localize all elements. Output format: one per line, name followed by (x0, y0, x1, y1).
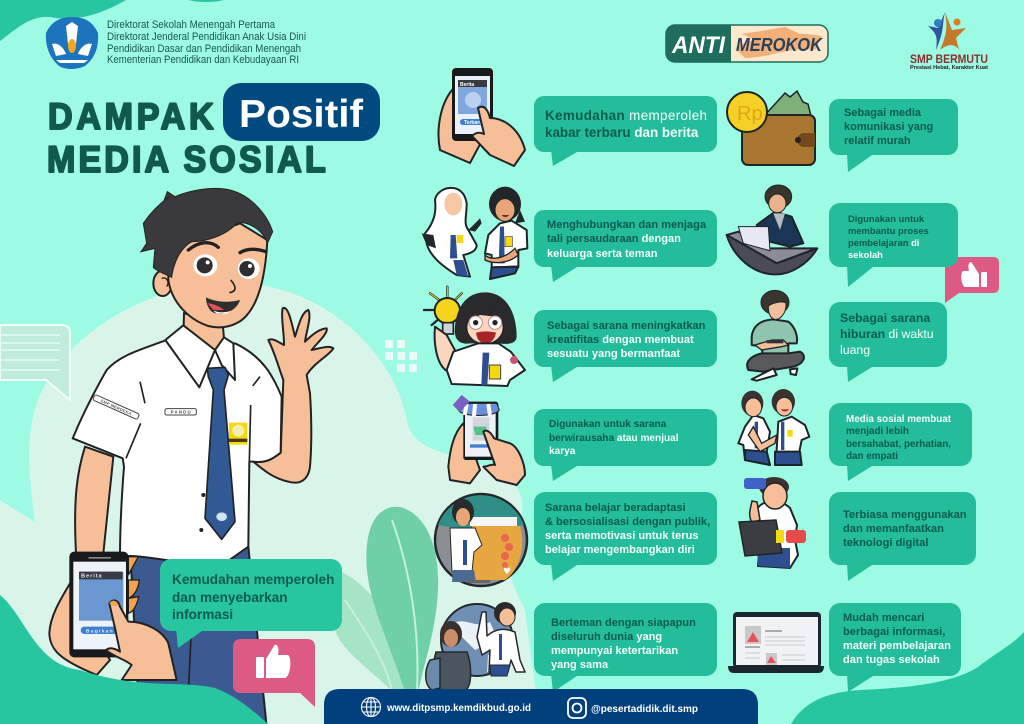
footer bar (324, 689, 758, 724)
right item 5 bubble (829, 492, 976, 581)
item 2 bubble: keluarga serta teman (547, 248, 658, 260)
item 4 illustration: online shop phone (448, 395, 525, 485)
main phone in hand: Berita (81, 573, 103, 579)
name tags (165, 409, 196, 415)
item 2 bubble (534, 210, 717, 282)
right item 6 bubble: dan tugas sekolah (843, 654, 940, 666)
title: dampak media sosial: DAMPAK (48, 96, 214, 137)
eyebrows (188, 243, 266, 253)
left hand (49, 583, 110, 675)
item 1 bubble (534, 96, 717, 166)
right item 2 illustration: person at desk with laptop (727, 185, 817, 274)
item 5 bubble: Sarana belajar beradaptasi (545, 502, 686, 514)
right item 5 illustration: boy with laptop (739, 477, 806, 568)
right item 5 bubble: teknologi digital (843, 537, 928, 549)
fingertips (128, 557, 139, 613)
item 3 bubble: sesuatu yang bermanfaat (547, 348, 681, 360)
left speech bubble (160, 559, 342, 648)
right item 1 bubble: komunikasi yang (844, 121, 933, 133)
right item 3 bubble: hiburan di waktu (840, 327, 934, 341)
item 6 illustration: friends and globe (426, 602, 525, 690)
bottom left green blob (0, 595, 268, 724)
item 3 illustration: girl with light bulb (424, 287, 525, 386)
item 6 bubble: mempunyai ketertarikan (551, 645, 678, 657)
item 3 bubble: kreatifitas dengan membuat (547, 334, 694, 346)
item 5 bubble (534, 492, 717, 581)
right item 2 bubble: sekolah (848, 249, 883, 260)
item 1 illustration: hand with phone (438, 68, 525, 166)
main phone in hand: Bagikan (86, 628, 113, 634)
name tags: PANDU (171, 410, 191, 415)
hair (141, 188, 273, 277)
item 3 bubble (534, 310, 717, 382)
item 1 illustration: hand with phone: Berita (460, 82, 474, 88)
right arm and waving hand (253, 308, 333, 483)
right item 5 bubble: Terbiasa menggunakan (843, 509, 967, 521)
item 4 bubble: Digunakan untuk sarana (549, 419, 667, 430)
left speech bubble: dan menyebarkan (172, 590, 288, 605)
phone body (69, 552, 128, 657)
logo: smp bermutu: Prestasi Hebat, Karakter Kuat (910, 65, 988, 71)
right hand (106, 600, 177, 680)
icon: instagram (568, 698, 586, 718)
right item 4 bubble: menjadi lebih (846, 426, 909, 437)
left pink thumbs up (233, 639, 315, 707)
right item 2 bubble: pembelajaran di (848, 237, 919, 248)
header institution text: Direktorat Jenderal Pendidikan Anak Usia Dini (107, 31, 306, 43)
right item 2 bubble: Digunakan untuk (848, 213, 925, 224)
header institution text: Kementerian Pendidikan dan Kebudayaan RI (107, 54, 299, 66)
collar (165, 325, 235, 387)
right item 4 bubble: bersahabat, perhatian, (846, 439, 951, 450)
buttons (201, 493, 205, 497)
main phone in hand (49, 552, 177, 680)
website: www.ditpsmp.kemdikbud.go.id (386, 702, 531, 714)
instagram handle: @pesertadidik.dit.smp (591, 703, 698, 715)
right pink thumbs up (945, 257, 999, 303)
necktie (205, 367, 235, 539)
decorative speech bubble (0, 325, 70, 400)
item 4 bubble (534, 409, 717, 481)
right item 6 bubble: berbagai informasi, (843, 626, 945, 638)
right item 1 bubble (829, 99, 958, 172)
bottom right green blob (791, 632, 1024, 724)
right item 4 illustration: two friends (738, 389, 809, 465)
header logo (46, 17, 98, 69)
logo: smp bermutu: SMP BERMUTU (910, 54, 988, 66)
mouth (206, 297, 240, 314)
item 6 bubble: yang sama (551, 659, 609, 671)
right item 3 bubble: luang (840, 343, 870, 357)
right item 5 bubble: dan memanfaatkan (843, 523, 944, 535)
right item 4 bubble: dan empati (846, 451, 898, 462)
main character: student: SMP MERDEKA (100, 398, 132, 416)
header institution text: Direktorat Sekolah Menengah Pertama (107, 19, 275, 31)
right item 1 bubble: relatif murah (844, 135, 911, 147)
main character: student (73, 188, 333, 724)
item 1 bubble: Kemudahan memperoleh (545, 108, 707, 123)
right item 1 illustration: wallet with coin: Rp (737, 103, 763, 125)
item 5 bubble: belajar mengembangkan diri (545, 544, 695, 556)
right item 2 bubble: membantu proses (848, 225, 929, 236)
item 6 bubble: diseluruh dunia yang (551, 631, 662, 643)
trousers (130, 547, 267, 724)
badge: anti merokok: MEROKOK (736, 35, 824, 55)
left speech bubble: informasi (172, 607, 233, 622)
title: dampak media sosial: MEDIA SOSIAL (47, 139, 326, 180)
item 6 bubble: Berteman dengan siapapun (551, 617, 696, 629)
item 2 illustration: two girls (422, 187, 527, 279)
left speech bubble: Kemudahan memperoleh (172, 572, 334, 587)
right item 1 illustration: wallet with coin (727, 91, 815, 165)
right item 6 bubble: materi pembelajaran (843, 640, 951, 652)
left arm (75, 447, 113, 553)
item 6 bubble (534, 603, 717, 692)
item 3 bubble: Sebagai sarana meningkatkan (547, 320, 706, 332)
plant leaves (333, 507, 438, 692)
header institution text (107, 19, 306, 66)
right item 4 bubble (829, 403, 972, 481)
right item 6 illustration: laptop with article (728, 612, 824, 673)
logo: smp bermutu (910, 12, 988, 71)
title: dampak media sosial (47, 96, 326, 180)
badge (229, 423, 247, 445)
item 1 illustration: hand with phone: Terbaru (464, 120, 482, 126)
eyes (193, 254, 217, 276)
nose (229, 280, 235, 293)
top left green blob (0, 0, 126, 41)
top centre green blob (184, 0, 228, 2)
decorative squares (385, 340, 417, 372)
item 5 bubble: & bersosialisasi dengan publik, (545, 516, 710, 528)
badge: anti merokok: ANTI (671, 32, 726, 59)
item 5 bubble: serta memotivasi untuk terus (545, 530, 698, 542)
right item 6 bubble (829, 603, 961, 692)
pale background blob (0, 283, 540, 724)
right item 3 illustration: boy with game (747, 290, 804, 381)
right item 6 bubble: Mudah mencari (843, 612, 924, 624)
ear (153, 271, 172, 296)
item 2 bubble: Menghubungkan dan menjaga (547, 219, 707, 231)
title pill: positif: Positif (239, 93, 364, 136)
badge: anti merokok (666, 25, 828, 62)
header institution text: Pendidikan Dasar dan Pendidikan Menengah (107, 43, 301, 55)
item 4 bubble: karya (549, 446, 576, 457)
right item 2 bubble (829, 203, 958, 287)
item 5 illustration: presenter in circle (435, 494, 527, 586)
item 2 bubble: tali persaudaraan dengan (547, 233, 681, 245)
shirt (73, 340, 282, 567)
item 1 bubble: kabar terbaru dan berita (545, 125, 699, 140)
icon: globe (362, 698, 380, 716)
right item 3 bubble: Sebagai sarana (840, 311, 930, 325)
right item 3 bubble (829, 302, 947, 382)
face (168, 223, 267, 327)
neck (183, 313, 224, 360)
right item 1 bubble: Sebagai media (844, 107, 922, 119)
item 4 bubble: berwirausaha atau menjual (549, 433, 679, 444)
right item 4 bubble: Media sosial membuat (846, 414, 952, 425)
title pill: positif (223, 83, 380, 141)
